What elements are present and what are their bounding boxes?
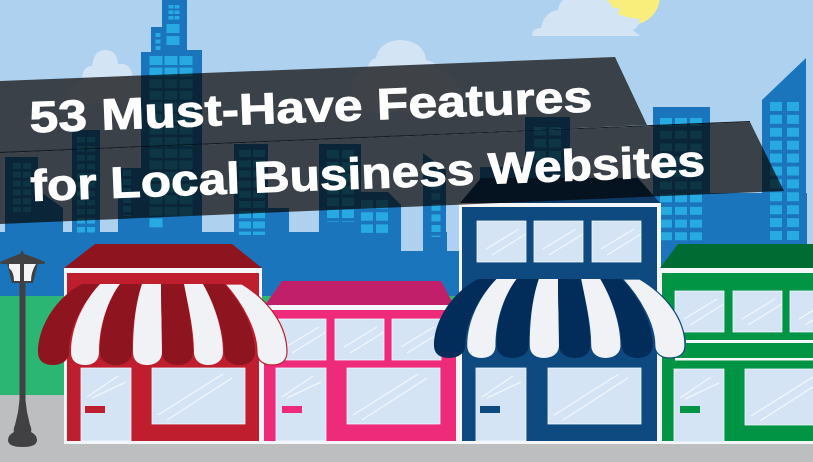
grass — [0, 296, 300, 396]
banner: bottom ribbon — [0, 122, 784, 224]
building: thin slanted — [423, 153, 446, 260]
building: mid upper — [525, 117, 570, 217]
green shop door — [674, 369, 724, 442]
cloud: top centre — [532, 0, 640, 36]
city skyline — [0, 0, 807, 300]
green shop upper windows — [675, 291, 813, 332]
skyline windows — [17, 5, 793, 243]
building: far left — [5, 157, 63, 260]
green shop roof — [660, 244, 813, 268]
building: centre left — [234, 144, 289, 260]
awning: blue — [434, 279, 685, 358]
lamp post — [8, 282, 37, 447]
awning: red — [38, 284, 287, 365]
pink shop window — [347, 368, 440, 424]
banner: top ribbon — [0, 57, 647, 153]
base block — [0, 232, 459, 300]
blue shop door handle — [480, 406, 500, 413]
street lamp — [0, 250, 45, 447]
building: behind blue shop — [480, 167, 540, 227]
blue shop upper windows — [477, 221, 641, 262]
red shop door — [81, 368, 131, 441]
green shop door handle — [680, 406, 700, 413]
building: left tall — [72, 130, 100, 260]
base block right — [655, 193, 807, 293]
blue shop roof — [460, 178, 660, 203]
shop: red — [64, 244, 262, 444]
pavement — [0, 395, 813, 462]
shop: blue — [459, 178, 661, 444]
cloud: middle — [352, 40, 464, 112]
cloud: behind banner — [67, 75, 164, 103]
blue shop window — [548, 368, 641, 424]
pink shop roof — [265, 281, 454, 305]
pink shop door — [276, 368, 326, 441]
sun — [602, 0, 660, 25]
red shop roof — [64, 244, 262, 268]
blue shop door — [476, 368, 526, 441]
title banner — [0, 57, 784, 224]
green shop window — [745, 369, 813, 425]
shop: green — [660, 244, 813, 444]
lamp cap — [0, 250, 45, 264]
pink shop door handle — [282, 406, 302, 413]
lamp lantern — [7, 263, 38, 283]
building: centre — [319, 144, 401, 260]
title line 2: for Local Business Websites — [30, 137, 706, 211]
title — [29, 72, 706, 211]
shop: pink — [262, 281, 459, 444]
red shop window — [152, 368, 245, 424]
red shop door handle — [85, 406, 105, 413]
title line 1: 53 Must-Have Features — [29, 72, 593, 142]
building: main tower — [141, 0, 202, 260]
building: right slanted tower — [762, 58, 806, 260]
building: low left — [118, 168, 143, 260]
pink shop upper windows — [277, 319, 441, 360]
building: right block — [653, 107, 710, 297]
cloud: left — [82, 50, 133, 80]
